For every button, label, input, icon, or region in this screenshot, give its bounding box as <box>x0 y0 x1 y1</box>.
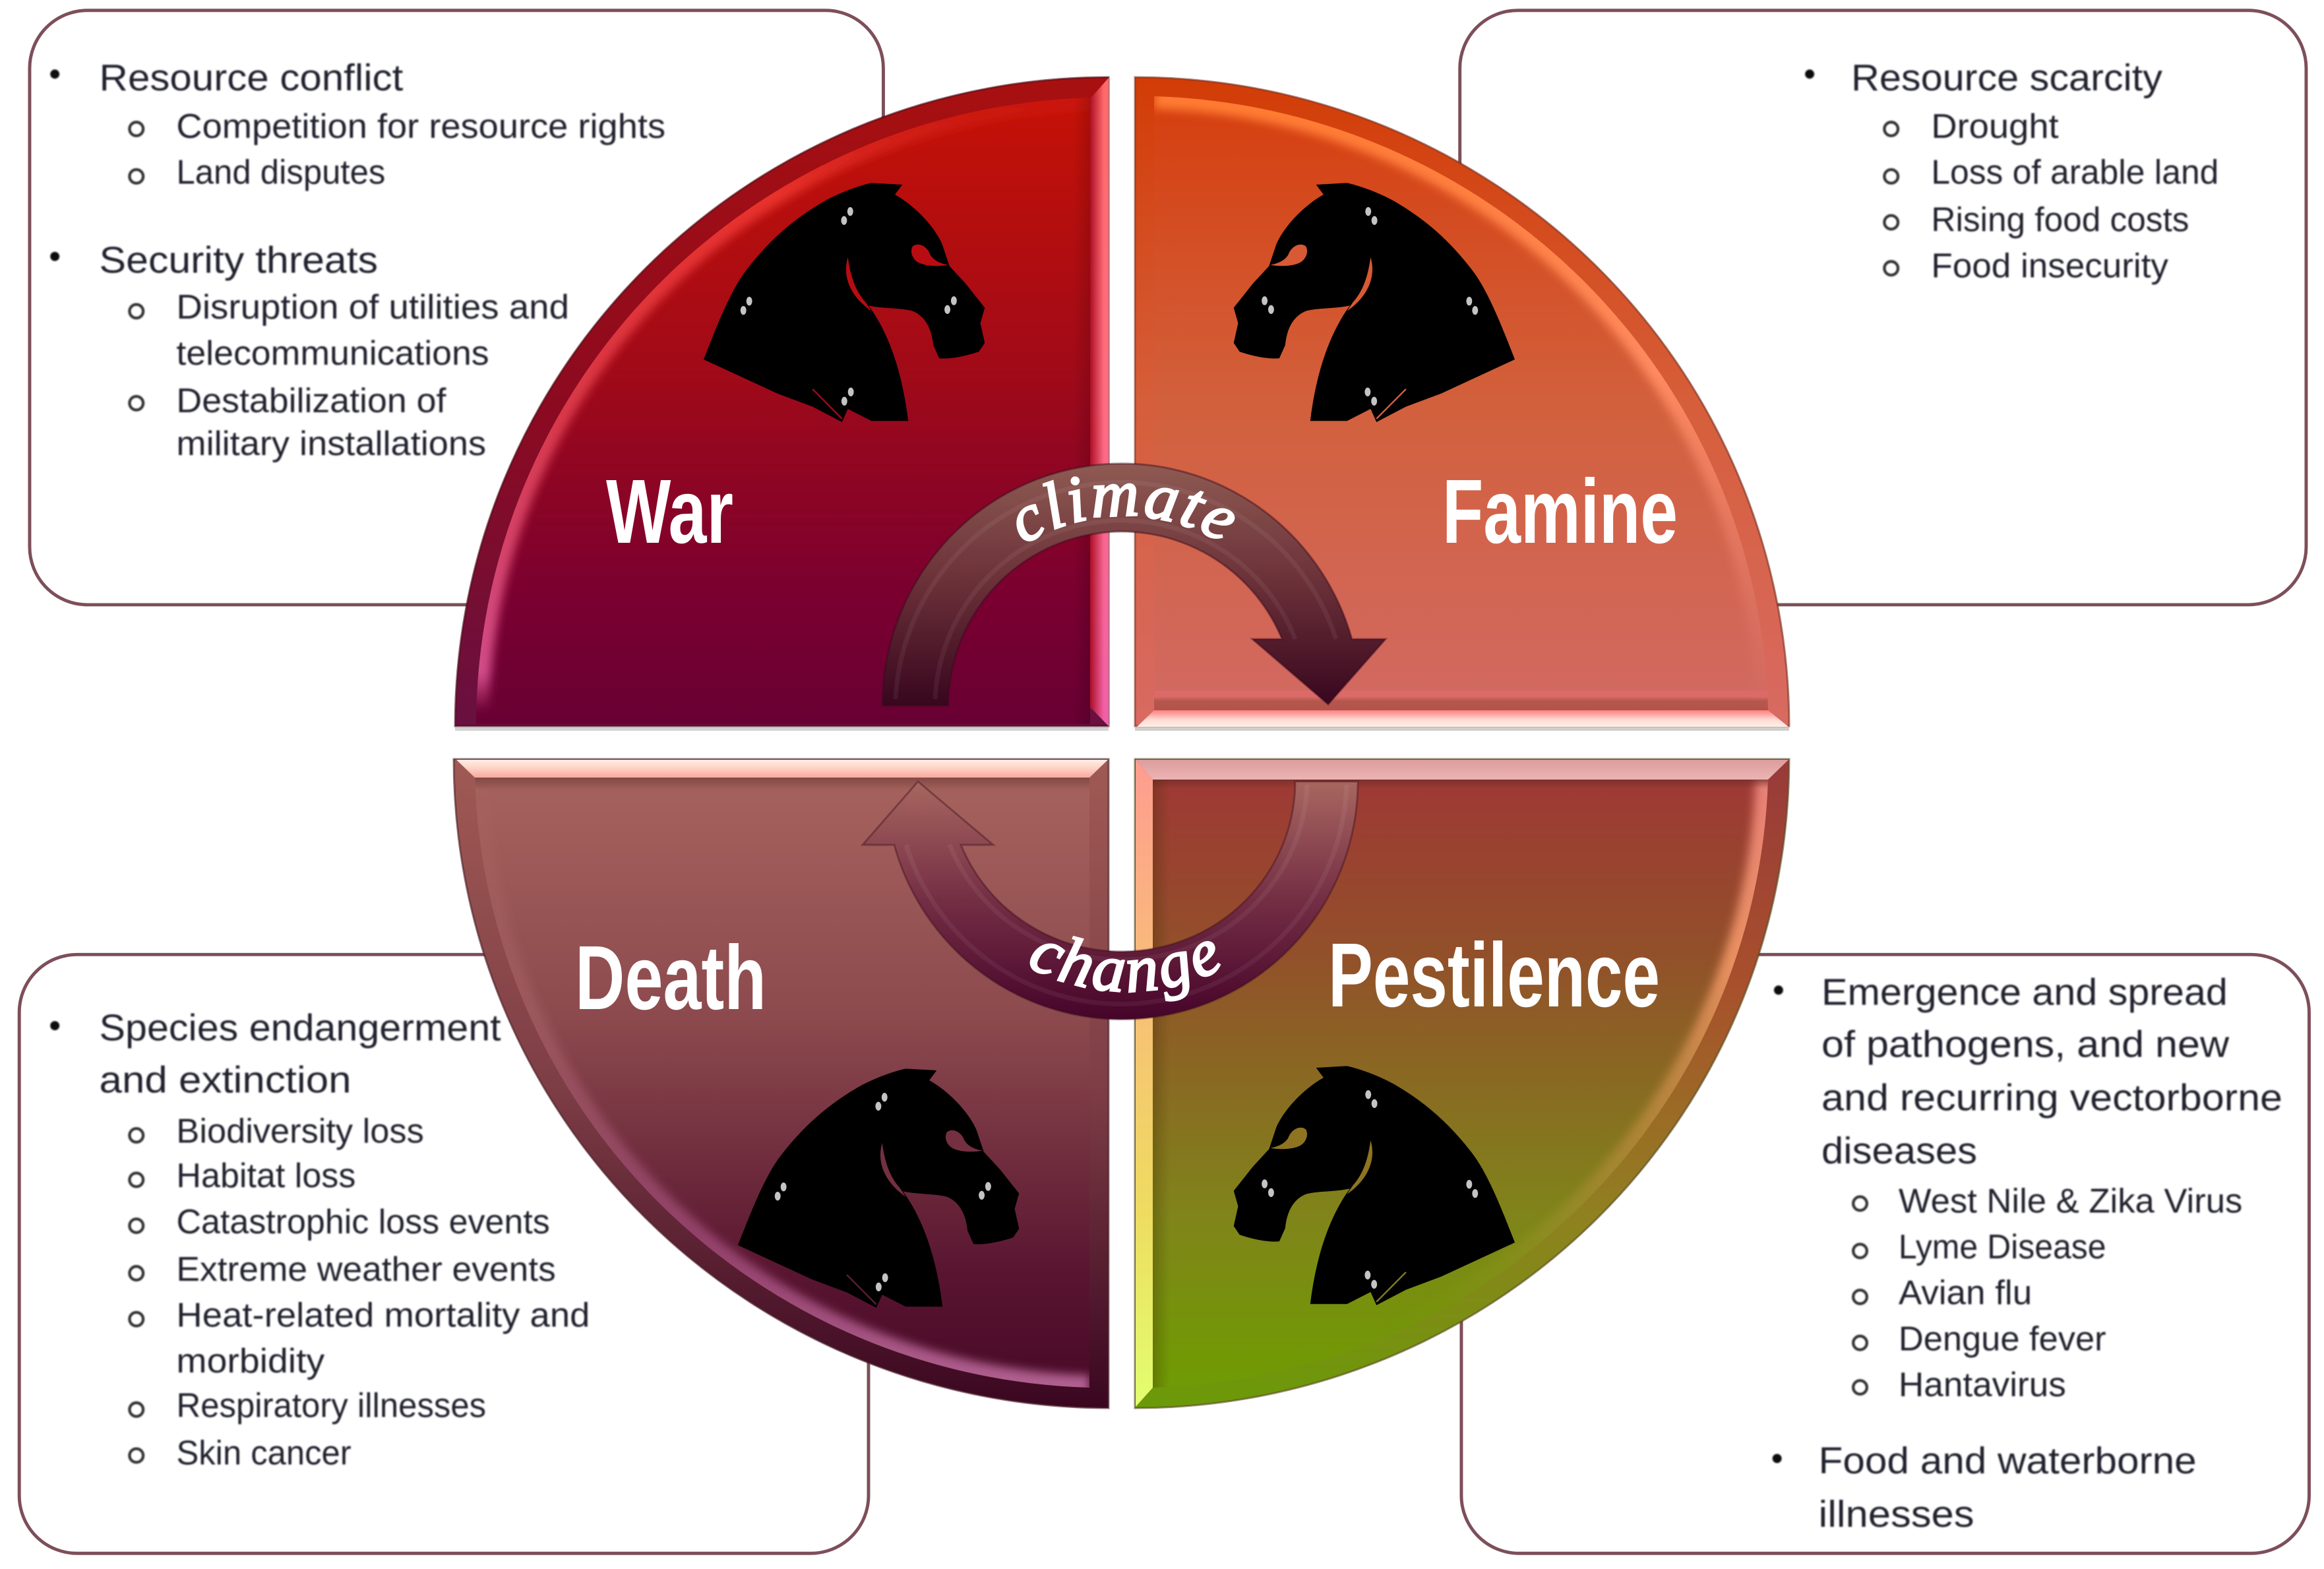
arrow: change <box>860 780 1359 1021</box>
quadrant: Pestilence <box>1135 759 1789 1408</box>
label: War: War <box>606 461 733 563</box>
item: Drought: Drought <box>1931 107 2059 145</box>
item: Catastrophic loss events: Catastrophic loss events <box>176 1202 550 1241</box>
panel: death factors <box>19 954 869 1553</box>
item: Destabilization of military installations: military installations <box>176 424 486 462</box>
item: Disruption of utilities and telecommunications <box>129 288 569 372</box>
quadrant: Famine <box>1135 77 1789 731</box>
item: Emergence and spread of pathogens <box>1774 971 2282 1171</box>
item: Disruption of utilities and telecommunications: telecommunications <box>176 334 489 372</box>
label: Famine: Famine <box>1442 461 1678 563</box>
icon: famine horse head <box>1234 183 1515 422</box>
icon: war horse head <box>704 183 985 422</box>
item: Species endangerment and extinction: and extinction <box>100 1059 352 1100</box>
item: Heat-related mortality and morbidity: morbidity <box>176 1341 324 1380</box>
panel: war factors <box>30 11 883 605</box>
item: Land disputes: Land disputes <box>176 153 385 191</box>
item: Food insecurity: Food insecurity <box>1931 246 2168 284</box>
item: Emergence and spread of pathogens: Emergence and spread <box>1821 971 2228 1013</box>
item: Extreme weather events: Extreme weather events <box>176 1250 556 1288</box>
quadrant: War <box>455 77 1109 731</box>
item: Respiratory illnesses: Respiratory illnesses <box>176 1386 486 1425</box>
panel: pestilence factors <box>1461 954 2309 1553</box>
item: Heat-related mortality and morbidity <box>129 1295 590 1380</box>
item: Habitat loss: Habitat loss <box>176 1156 355 1194</box>
item: Emergence and spread of pathogens: of pathogens, and new <box>1821 1023 2230 1064</box>
panel: famine factors <box>1460 11 2306 605</box>
item: Heat-related mortality and morbidity: Heat-related mortality and <box>176 1295 590 1334</box>
item: Loss of arable land: Loss of arable land <box>1931 153 2218 191</box>
text: climate: climate <box>1016 476 1235 541</box>
icon: death horse head <box>738 1068 1019 1308</box>
item: Dengue fever: Dengue fever <box>1899 1319 2106 1357</box>
item: Food and waterborne illnesses: Food and waterborne <box>1819 1440 2197 1481</box>
item: Destabilization of military installations: Destabilization of <box>176 381 446 419</box>
item: Emergence and spread of pathogens: diseases <box>1821 1130 1977 1171</box>
item: Rising food costs: Rising food costs <box>1931 200 2189 239</box>
item: Security threats: Security threats <box>100 239 378 281</box>
item: Disruption of utilities and telecommunications: Disruption of utilities and <box>176 288 569 326</box>
item: Drought <box>1884 107 2059 145</box>
item: West Nile & Zika Virus: West Nile & Zika Virus <box>1899 1181 2242 1219</box>
item: Food and waterborne illnesses: illnesses <box>1819 1493 1974 1535</box>
label: Pestilence: Pestilence <box>1328 925 1660 1026</box>
item: Hantavirus: Hantavirus <box>1899 1365 2066 1403</box>
item: Lyme Disease: Lyme Disease <box>1899 1227 2106 1266</box>
item: Destabilization of military installations <box>129 381 486 462</box>
item: Species endangerment and extinction <box>50 1007 501 1100</box>
item: Emergence and spread of pathogens: and recurring vectorborne <box>1821 1076 2282 1118</box>
text: change: change <box>1030 935 1221 1002</box>
item: Resource conflict: Resource conflict <box>100 57 404 98</box>
icon: pestilence horse head <box>1234 1066 1515 1305</box>
item: Species endangerment and extinction: Species endangerment <box>100 1007 501 1049</box>
item: Biodiversity loss: Biodiversity loss <box>176 1112 424 1150</box>
item: Skin cancer: Skin cancer <box>176 1433 352 1471</box>
item: Resource scarcity: Resource scarcity <box>1851 57 2162 98</box>
quadrant: Death <box>454 759 1109 1408</box>
item: Avian flu: Avian flu <box>1899 1274 2032 1312</box>
label: Death: Death <box>575 927 766 1029</box>
arrow: climate <box>881 462 1388 707</box>
item: Food and waterborne illnesses <box>1773 1440 2197 1535</box>
item: Competition for resource rights: Competition for resource rights <box>176 107 665 145</box>
